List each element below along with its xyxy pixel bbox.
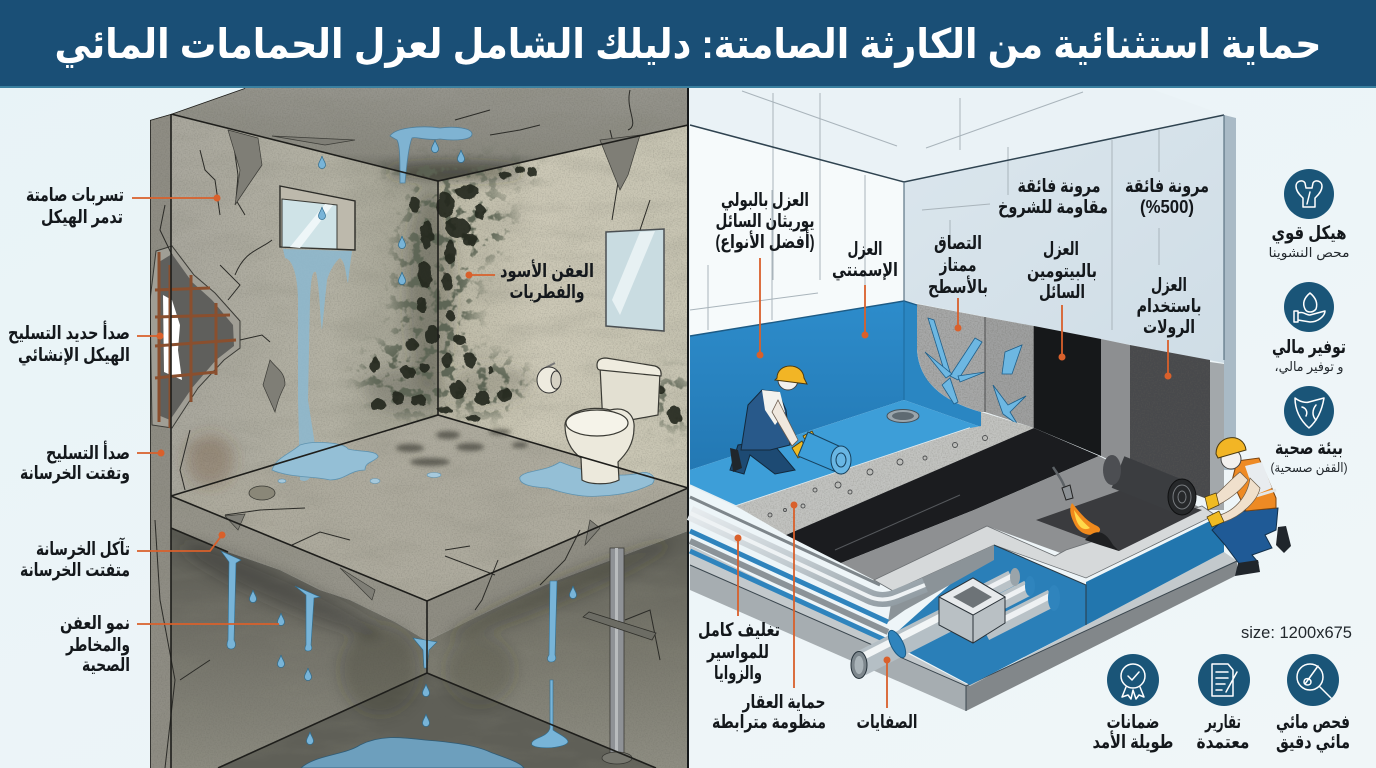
puddle near toilet [520, 462, 654, 496]
callout: mould and health risk [60, 612, 279, 675]
callout: silent leaks: تدمر الهيكل [41, 206, 123, 228]
left edge pipes [690, 497, 925, 640]
callout: crack resistance [998, 175, 1108, 218]
puddle under window [272, 442, 378, 480]
blue trench [887, 518, 1224, 685]
callout: cementitious: الإسمنتي [832, 259, 898, 281]
benefit: healthy environment: (القفن صسحية) [1270, 460, 1348, 476]
badge: long-term warranties: طويلة الأمد [1092, 730, 1174, 753]
callout: liquid bitumen: السائل [1039, 281, 1085, 302]
falling drops [250, 586, 576, 762]
torch-applied mat [1036, 488, 1202, 551]
badge: certified reports: معتمدة [1196, 731, 1250, 752]
size note: size: 1200x675 [1241, 623, 1352, 642]
callouts: protection side [698, 175, 1209, 733]
panel: waterproofing system illustration [690, 88, 1291, 711]
texture overlay [150, 88, 688, 768]
rebar hole [150, 246, 240, 428]
callout: liquid bitumen: العزل [1043, 238, 1079, 260]
callout: mould and health risk: نمو العفن [60, 612, 130, 634]
callout: black mould [466, 259, 594, 303]
icon: shield leaves [1284, 386, 1334, 436]
grey membrane strip and rolled sheet on wall [1101, 339, 1224, 510]
ceiling [171, 88, 688, 181]
benefit: healthy environment: بيئة صحية [1275, 437, 1343, 458]
callout: black mould: العفن الأسود [500, 259, 594, 282]
ceiling and walls [690, 88, 1236, 470]
cracks [155, 90, 660, 768]
callout: polyurethane: (أفضل الأنواع) [716, 230, 814, 253]
blue waterproofed wall and floor [690, 301, 981, 506]
callout: adhesion: ممتاز [939, 254, 976, 276]
callout: concrete corrosion: تآكل الخرسانة [36, 537, 130, 560]
floor drain [887, 410, 919, 422]
light trim [874, 506, 1215, 591]
callout: polyurethane [716, 189, 814, 358]
callout: drains [856, 656, 918, 732]
window [280, 186, 355, 250]
callout: rebar rust [8, 321, 164, 366]
callout: black mould: والفطريات [510, 281, 584, 303]
badge: certified reports [1196, 654, 1250, 752]
black mould patches [349, 155, 687, 440]
structural edge lines [150, 88, 688, 768]
gas torch flame [1053, 467, 1119, 551]
callout: adhesion [928, 232, 988, 332]
icon: magnifier [1287, 654, 1339, 706]
lower floor puddle [301, 738, 524, 768]
callout: concrete corrosion [20, 532, 226, 581]
callout: reinforcement rust [20, 441, 164, 484]
icon: rosette [1107, 654, 1159, 706]
header band with title [0, 0, 1376, 88]
callout: crack resistance: مقاومة للشروخ [998, 196, 1108, 218]
peeling plaster [225, 130, 640, 600]
liquid bitumen [786, 326, 1101, 563]
concrete panels with crystals [917, 304, 1034, 428]
callout: property protection: حماية العقار [742, 691, 826, 713]
callout: pipe wrapping [698, 534, 780, 684]
callout: rebar rust: صدأ حديد التسليح [8, 321, 130, 344]
debris and small puddles [249, 472, 441, 500]
mirror [606, 229, 664, 331]
callout: pipe wrapping: والزوايا [714, 662, 762, 684]
callout: adhesion: التصاق [934, 232, 982, 253]
callouts: damage side [8, 184, 594, 675]
callout: drains: الصفايات [856, 711, 918, 732]
callout: rebar rust: الهيكل الإنشائي [18, 344, 130, 366]
wet floor [171, 415, 688, 601]
callout: elasticity: (%500) [1140, 196, 1194, 217]
callout: reinforcement rust: صدأ التسليح [46, 441, 130, 464]
benefit: financial savings: و توفير مالي، [1274, 359, 1344, 375]
callout: pipe wrapping: تغليف كامل [698, 619, 780, 640]
base slab [690, 545, 1237, 711]
benefit: strong structure: هيكل قوي [1272, 222, 1346, 245]
callout: cementitious [832, 238, 898, 338]
callout: adhesion: بالأسطح [928, 275, 988, 298]
left wall [171, 114, 438, 496]
side column [150, 114, 171, 768]
water stream from window [283, 249, 352, 481]
benefit: healthy environment [1270, 386, 1348, 476]
callout: crack resistance: مرونة فائقة [1018, 175, 1100, 197]
service badges row [1092, 654, 1350, 753]
callout: pipe wrapping: للمواسير [706, 641, 769, 663]
icon: hand holding money bag [1284, 282, 1334, 332]
grey floor [841, 456, 1205, 580]
concrete strip [736, 412, 1034, 535]
callout: rolls: باستخدام [1136, 295, 1202, 316]
toilet paper [537, 363, 561, 393]
callout: cementitious: العزل [848, 238, 882, 260]
black membrane roll [1103, 455, 1196, 515]
callout: property protection: منظومة مترابطة [712, 711, 826, 733]
slab front faces [171, 488, 688, 641]
callout: rolls: الرولات [1143, 316, 1195, 338]
benefit: financial savings [1272, 282, 1346, 375]
benefit: financial savings: توفير مالي [1272, 336, 1346, 358]
toilet [565, 358, 661, 484]
concealed pipes and drain box [851, 568, 1060, 678]
callout: silent leaks [26, 184, 220, 228]
badge: certified reports: تقارير [1204, 711, 1241, 733]
callout: concrete corrosion: متفتت الخرسانة [20, 559, 130, 581]
callout: liquid bitumen: بالبيتومين [1027, 260, 1097, 282]
callout: polyurethane: يوريثان السائل [716, 210, 814, 232]
badge: precise water inspection: فحص مائي [1276, 711, 1350, 733]
callout: polyurethane: العزل بالبولي [721, 189, 809, 211]
icon: document and pen [1198, 654, 1250, 706]
callout: silent leaks: تسربات صامتة [26, 184, 124, 206]
badge: precise water inspection [1276, 654, 1350, 753]
callout: mould and health risk: الصحية [82, 654, 130, 675]
benefit: strong structure: محص النشوينا [1268, 245, 1350, 261]
lower walls [171, 528, 688, 768]
worker rolling blue membrane [730, 366, 851, 474]
vertical pipe and bracket [583, 548, 656, 764]
callout: mould and health risk: والمخاطر [65, 634, 130, 656]
badge: long-term warranties [1092, 654, 1174, 753]
callout: property protection [712, 502, 826, 733]
lower floor [218, 673, 656, 768]
badge: precise water inspection: مائي دقيق [1276, 731, 1350, 753]
central divider [687, 88, 689, 768]
callout: elasticity [1125, 175, 1209, 217]
benefits column [1268, 169, 1350, 476]
callout: elasticity: مرونة فائقة [1125, 175, 1209, 197]
benefit: strong structure [1268, 169, 1350, 261]
drips under slab [221, 551, 568, 748]
panel: damaged bathroom illustration [150, 88, 688, 768]
soft dark stains [174, 164, 675, 715]
mould on floor [396, 429, 528, 466]
ceiling water stain [318, 127, 472, 285]
callout: liquid bitumen [1027, 238, 1097, 360]
back wall [438, 125, 688, 490]
callout: rolls: العزل [1151, 274, 1187, 296]
worker applying rolls [1205, 438, 1291, 576]
icon: flexed torso [1284, 169, 1334, 219]
callout: rolls [1136, 274, 1202, 380]
badge: long-term warranties: ضمانات [1106, 711, 1160, 732]
callout: reinforcement rust: وتفتت الخرسانة [20, 462, 130, 484]
